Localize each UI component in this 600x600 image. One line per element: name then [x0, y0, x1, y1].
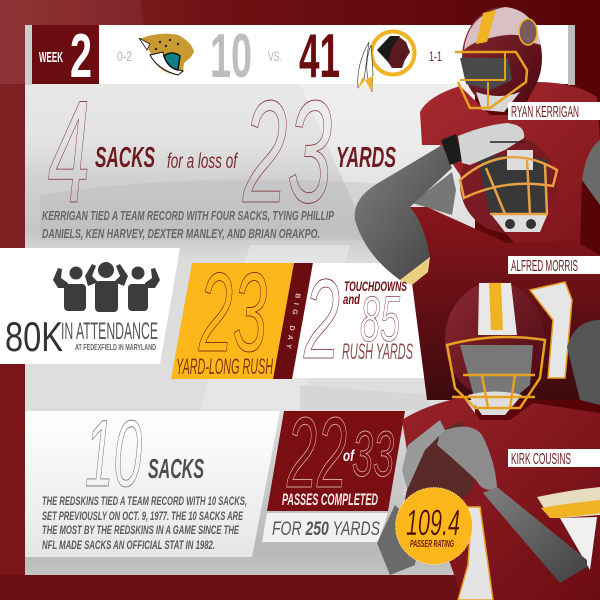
header bar	[32, 22, 568, 92]
jersey number	[530, 282, 572, 378]
passer rating badge	[396, 488, 472, 564]
home score: 41	[299, 22, 340, 91]
sleeve	[537, 487, 600, 518]
jersey	[410, 207, 600, 400]
description	[42, 496, 247, 552]
football	[405, 422, 474, 510]
of: of	[343, 448, 355, 465]
85: 85	[360, 283, 400, 355]
away record: 0-2	[117, 48, 132, 64]
and: and	[343, 291, 360, 307]
passes completed: PASSES COMPLETED	[282, 490, 378, 509]
away score: 10	[210, 22, 252, 91]
icon: jaguars logo	[139, 34, 194, 75]
red edge accents	[0, 84, 25, 575]
helmet	[445, 282, 545, 415]
sacks stat	[42, 70, 396, 241]
80K: 80K	[5, 313, 63, 360]
rating label: PASSER RATING	[410, 539, 454, 550]
versus: VS.	[268, 48, 282, 64]
big 10: 10	[85, 401, 142, 507]
rushing stats panel: RUSH YARDS	[342, 339, 413, 364]
touchdowns: TOUCHDOWNS	[344, 278, 407, 294]
yards label: YARDS	[336, 142, 396, 174]
player: Kirk Cousins	[377, 282, 600, 600]
player: Alfred Morris	[355, 123, 600, 400]
wrist band	[441, 134, 463, 165]
big 23 rush: 23	[198, 250, 267, 375]
attendance panel	[0, 248, 180, 364]
week box: 2	[70, 22, 92, 91]
for a loss of: for a loss of	[167, 150, 238, 173]
description: THE REDSKINS TIED A TEAM RECORD WITH 10 SACKS,	[42, 496, 247, 508]
icon: crowd of fans	[53, 262, 160, 312]
yellow rush panel	[171, 250, 294, 379]
icon: redskins logo	[358, 32, 414, 92]
big 2: 2	[303, 256, 340, 382]
raised arm right	[582, 140, 600, 205]
description: DANIELS, KEN HARVEY, DEXTER MANLEY, AND BRIAN ORAKPO.	[42, 227, 320, 241]
venue: AT FEDEXFIELD IN MARYLAND	[75, 342, 156, 352]
description: KERRIGAN TIED A TEAM RECORD WITH FOUR SACKS, TYING PHILLIP	[42, 209, 334, 223]
hands	[437, 427, 497, 490]
description: SET PREVIOUSLY ON OCT. 9, 1977. THE 10 SACKS ARE	[42, 511, 243, 523]
big day band: BIG DAY	[284, 293, 301, 349]
33: 33	[352, 418, 394, 490]
player: Ryan Kerrigan	[420, 7, 600, 250]
number 8	[453, 507, 493, 600]
sacks label: SACKS	[95, 142, 155, 174]
in attendance: IN ATTENDANCE	[61, 318, 158, 345]
helmet	[460, 135, 557, 233]
arm	[483, 487, 587, 583]
big 23: 23	[242, 70, 332, 233]
glove	[458, 123, 524, 165]
description: THE MOST BY THE REDSKINS IN A GAME SINCE THE	[42, 525, 239, 537]
for 250 yards	[262, 513, 388, 542]
rating value: 109.4	[406, 502, 460, 543]
week box	[32, 22, 99, 91]
undershirt	[560, 517, 597, 570]
jersey	[420, 82, 600, 250]
jersey	[402, 397, 600, 600]
helmet	[455, 7, 542, 112]
big 4: 4	[48, 70, 90, 233]
for 250 yards: FOR 250 YARDS	[272, 519, 380, 540]
arm	[355, 145, 452, 280]
description	[42, 209, 334, 241]
week box: WEEK	[39, 49, 63, 66]
sacks label: SACKS	[148, 453, 204, 484]
right-side arm	[567, 320, 600, 405]
far arm	[412, 172, 456, 215]
big day band	[273, 263, 313, 379]
rushing stats panel	[293, 256, 427, 382]
description: NFL MADE SACKS AN OFFICIAL STAT IN 1982.	[42, 540, 215, 552]
home record: 1-1	[429, 48, 442, 64]
ten sacks panel	[25, 401, 280, 557]
passes panel	[267, 397, 405, 511]
yellow rush panel: YARD-LONG RUSH	[176, 354, 273, 379]
22: 22	[286, 397, 347, 509]
